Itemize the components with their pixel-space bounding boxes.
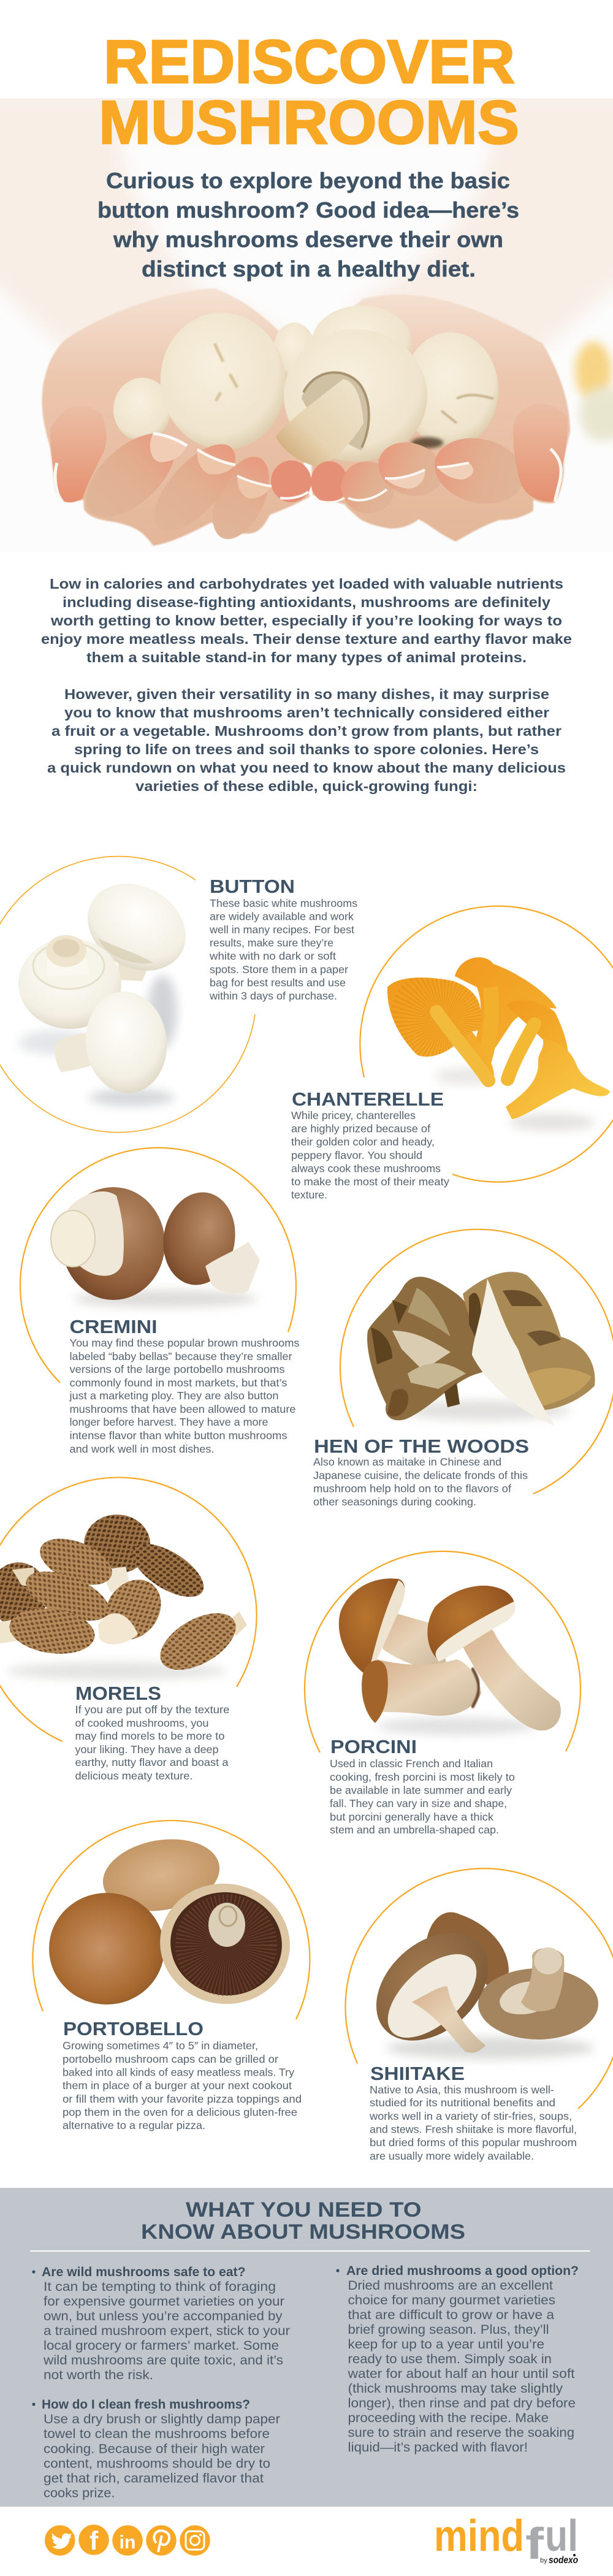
- heading: shiitake: SHIITAKE: [370, 2063, 465, 2084]
- text: cremini description: You may find these popular brown mushrooms: [70, 1337, 300, 1349]
- heading: morels: MORELS: [75, 1683, 161, 1704]
- mushroom center stem: [276, 379, 364, 467]
- question: wild mushrooms: a trained mushroom expert, stick to your: [44, 2324, 290, 2338]
- panel: what you need to know: [0, 2188, 613, 2507]
- text: porcini description: Used in classic French and Italian: [330, 1757, 493, 1770]
- left fingers: [55, 418, 311, 548]
- question: cleaning mushrooms: get that rich, caramelized flavor that: [44, 2471, 264, 2486]
- question: wild mushrooms: wild mushrooms are quite toxic, and it’s: [43, 2353, 283, 2368]
- image: porcini mushrooms: [339, 1578, 561, 1735]
- text: shiitake description: works well in a variety of stir-fries, soups,: [369, 2110, 572, 2122]
- text: hen of the woods description: other seasonings during cooking.: [313, 1496, 476, 1508]
- text: portobello description: alternative to a regular pizza.: [63, 2119, 205, 2131]
- question: cleaning mushrooms: towel to clean the mushrooms before: [44, 2427, 270, 2441]
- subtitle: distinct spot in a healthy diet.: [142, 256, 476, 281]
- panel: hen of the woods: [313, 1229, 613, 1508]
- question: wild mushrooms: Are wild mushrooms safe to eat?: [42, 2265, 245, 2279]
- question: dried mushrooms: (thick mushrooms may take slightly: [348, 2382, 563, 2396]
- logo: mindful by sodexo: f: [525, 2520, 544, 2569]
- logo: mindful by sodexo: sodexo: [549, 2555, 578, 2566]
- text: shiitake description: but dried forms of this popular mushroom: [370, 2136, 577, 2149]
- image: morel mushrooms: [0, 1515, 247, 1681]
- intro text: spring to life on trees and soil thanks to spore colonies. Here’s: [74, 741, 539, 757]
- intro text: a fruit or a vegetable. Mushrooms don’t grow from plants, but rather: [51, 723, 562, 739]
- image: shiitake mushrooms: [356, 1911, 598, 2062]
- heading: hen of the woods: HEN OF THE WOODS: [314, 1435, 529, 1457]
- text: cremini description: labeled “baby bellas” because they’re smaller: [70, 1350, 292, 1363]
- hero photo: hands holding mushrooms: [0, 80, 613, 552]
- left nails: [150, 433, 187, 462]
- image: cremini mushrooms: [51, 1187, 260, 1307]
- question: wild mushrooms: own, but unless you’re accompanied by: [44, 2309, 283, 2323]
- text: chanterelle description: While pricey, chanterelles: [291, 1109, 416, 1122]
- hero blurred backdrop with arms: [0, 98, 613, 446]
- image: hen of the woods mushroom: [367, 1272, 595, 1426]
- question: dried mushrooms: keep for up to a year until you’re: [348, 2337, 544, 2352]
- left hand: [42, 288, 310, 546]
- question: dried mushrooms: water for about half an hour until soft: [347, 2367, 575, 2381]
- right hand: [306, 294, 570, 541]
- text: shiitake description: Native to Asia, this mushroom is well-: [370, 2084, 554, 2096]
- image: button mushrooms: [18, 866, 202, 1106]
- text: morels description: your liking. They have a deep: [75, 1743, 218, 1756]
- intro text: varieties of these edible, quick-growing fungi:: [135, 778, 478, 794]
- question: cleaning mushrooms: How do I clean fresh mushrooms?: [42, 2397, 250, 2412]
- icon: linkedin: [112, 2525, 143, 2556]
- question: cleaning mushrooms: cooking. Because of their high water: [44, 2442, 265, 2456]
- text: shiitake description: and stews. Fresh shiitake is more flavorful,: [370, 2123, 577, 2135]
- title: MUSHROOMS: [99, 88, 519, 157]
- text: porcini description: cooking, fresh porcini is most likely to: [330, 1771, 515, 1783]
- heading: what you need to know: WHAT YOU NEED TO: [186, 2198, 422, 2222]
- text: chanterelle description: texture.: [291, 1188, 327, 1201]
- left thumb: [50, 405, 107, 503]
- text: porcini description: [330, 1757, 515, 1836]
- text: cremini description: commonly found in most markets, but that’s: [70, 1377, 287, 1389]
- panel: porcini: [305, 1551, 581, 1836]
- question: cleaning mushrooms: cooks prize.: [44, 2486, 115, 2501]
- question: dried mushrooms: longer), then rinse and pat dry before: [348, 2396, 576, 2410]
- mushroom right: [403, 332, 498, 448]
- text: shiitake description: are usually more widely available.: [370, 2150, 534, 2162]
- text: chanterelle description: their golden color and heady,: [291, 1136, 435, 1148]
- icon: twitter: [45, 2525, 75, 2556]
- text: button description: [209, 897, 357, 1002]
- question: dried mushrooms: proceeding with the recipe. Make: [348, 2411, 549, 2425]
- panel: shiitake: [345, 1868, 613, 2162]
- mushroom back top: [311, 305, 412, 381]
- text: portobello description: [63, 2039, 302, 2131]
- image: chanterelle mushrooms: [387, 957, 610, 1131]
- question: wild mushrooms: not worth the risk.: [44, 2368, 153, 2382]
- text: morels description: may find morels to be more to: [75, 1730, 224, 1742]
- question: dried mushrooms: brief growing season. Plus, they’ll: [348, 2323, 549, 2337]
- question: cleaning mushrooms: [32, 2397, 280, 2501]
- logo: mindful by sodexo: [434, 2512, 578, 2569]
- text: chanterelle description: peppery flavor. You should: [291, 1149, 422, 1161]
- text: shiitake description: studied for its nutritional benefits and: [370, 2096, 555, 2109]
- text: portobello description: them in place of a burger at your next cookout: [63, 2079, 292, 2092]
- text: porcini description: fall. They can vary in size and shape,: [330, 1797, 507, 1810]
- heading: what you need to know: KNOW ABOUT MUSHROOMS: [141, 2220, 465, 2244]
- subtitle: button mushroom? Good idea—here’s: [97, 197, 519, 223]
- panel: morels: [0, 1477, 257, 1782]
- text: chanterelle description: always cook these mushrooms: [291, 1163, 441, 1175]
- heading: porcini: PORCINI: [330, 1736, 417, 1757]
- intro text: a quick rundown on what you need to know about the many delicious: [47, 760, 566, 776]
- mushroom big left: [151, 305, 295, 458]
- text: cremini description: [69, 1337, 300, 1455]
- intro text: enjoy more meatless meals. Their dense texture and earthy flavor make: [41, 631, 572, 647]
- icon: pinterest: [146, 2525, 177, 2556]
- question: wild mushrooms: It can be tempting to think of foraging: [44, 2280, 276, 2294]
- title: REDISCOVER: [104, 28, 515, 96]
- text: cremini description: intense flavor than white button mushrooms: [70, 1429, 287, 1442]
- icon: instagram: [180, 2525, 210, 2556]
- title: [99, 28, 519, 157]
- mushroom left stem: [113, 378, 171, 441]
- text: button description: These basic white mushrooms: [210, 897, 357, 909]
- question: dried mushrooms: sure to strain and reserve the soaking: [348, 2426, 574, 2440]
- text: shiitake description: [369, 2084, 577, 2162]
- text: morels description: earthy, nutty flavor and boast a: [75, 1756, 229, 1768]
- text: button description: bag for best results and use: [210, 976, 346, 988]
- intro text: including disease-fighting antioxidants, mushrooms are definitely: [63, 594, 550, 610]
- text: portobello description: or fill them with your favorite pizza toppings and: [63, 2093, 302, 2105]
- text: hen of the woods description: Also known as maitake in Chinese and: [313, 1456, 501, 1468]
- intro text: [41, 576, 572, 794]
- text: portobello description: Growing sometimes 4″ to 5″ in diameter,: [63, 2039, 258, 2052]
- text: button description: are widely available and work: [210, 910, 354, 922]
- text: portobello description: portobello mushroom caps can be grilled or: [63, 2053, 278, 2065]
- text: hen of the woods description: Japanese cuisine, the delicate fronds of this: [313, 1469, 528, 1481]
- logo: mindful by sodexo: by: [540, 2557, 547, 2564]
- text: cremini description: longer before harvest. They have a more: [70, 1416, 268, 1428]
- text: cremini description: mushrooms that have been allowed to mature: [70, 1403, 296, 1415]
- question: dried mushrooms: choice for many gourmet varieties: [348, 2293, 555, 2307]
- icon: linkedin: in: [119, 2531, 136, 2553]
- panel: portobello: [32, 1821, 310, 2131]
- intro text: you to know that mushrooms aren’t technically considered either: [64, 705, 549, 720]
- icon: facebook: f: [89, 2526, 99, 2556]
- right nails: [385, 470, 425, 489]
- text: cremini description: and work well in most dishes.: [70, 1443, 215, 1455]
- text: morels description: of cooked mushrooms, you: [75, 1717, 208, 1729]
- question: cleaning mushrooms: Use a dry brush or slightly damp paper: [44, 2412, 280, 2426]
- question: wild mushrooms: [32, 2265, 290, 2382]
- text: button description: spots. Store them in a paper: [210, 963, 348, 976]
- panel: cremini: [20, 1148, 300, 1455]
- intro text: worth getting to know better, especially if you’re looking for ways to: [50, 613, 562, 629]
- panel: chanterelle: [291, 906, 613, 1201]
- question: dried mushrooms: liquid—it’s packed with flavor!: [348, 2440, 528, 2455]
- heading: what you need to know: [141, 2198, 465, 2244]
- social icons: [45, 2524, 210, 2556]
- heading: button: BUTTON: [210, 876, 295, 897]
- text: hen of the woods description: mushroom help hold on to the flavors of: [313, 1483, 511, 1495]
- question: dried mushrooms: [336, 2263, 579, 2455]
- text: cremini description: just a marketing ploy. They are also button: [69, 1389, 278, 1402]
- question: dried mushrooms: ready to use them. Simply soak in: [348, 2352, 552, 2366]
- subtitle: why mushrooms deserve their own: [113, 227, 503, 252]
- mushroom center cap: [284, 329, 427, 462]
- text: portobello description: baked into all kinds of easy meatless meals. Try: [63, 2066, 294, 2079]
- heading: chanterelle: CHANTERELLE: [292, 1088, 444, 1110]
- text: chanterelle description: [291, 1109, 449, 1201]
- mushroom back small: [273, 323, 315, 376]
- text: button description: white with no dark or soft: [209, 950, 336, 962]
- text: button description: results, make sure they’re: [210, 937, 333, 949]
- image: portobello mushrooms: [49, 1830, 298, 2012]
- intro text: However, given their versatility in so many dishes, it may surprise: [64, 686, 549, 702]
- text: portobello description: pop them in the oven for a delicious gluten-free: [63, 2106, 297, 2118]
- panel: button: [0, 857, 357, 1133]
- icon: facebook: [78, 2524, 109, 2556]
- text: porcini description: be available in late summer and early: [330, 1784, 512, 1797]
- text: cremini description: versions of the large portobello mushrooms: [70, 1363, 285, 1375]
- question: wild mushrooms: for expensive gourmet varieties on your: [44, 2295, 284, 2309]
- question: cleaning mushrooms: content, mushrooms should be dry to: [44, 2456, 270, 2471]
- subtitle: [97, 168, 519, 281]
- right fingers: [311, 404, 568, 522]
- text: chanterelle description: to make the most of their meaty: [291, 1175, 449, 1188]
- intro text: them a suitable stand-in for many types of animal proteins.: [86, 649, 527, 665]
- question: dried mushrooms: Dried mushrooms are an excellent: [348, 2279, 553, 2293]
- text: hen of the woods description: [313, 1456, 528, 1508]
- logo: mindful by sodexo: ul: [545, 2512, 578, 2561]
- text: chanterelle description: are highly prized because of: [291, 1122, 430, 1134]
- question: wild mushrooms: local grocery or farmers’ market. Some: [44, 2339, 279, 2353]
- subtitle: Curious to explore beyond the basic: [106, 168, 510, 193]
- text: morels description: delicious meaty texture.: [75, 1770, 192, 1782]
- question: dried mushrooms: Are dried mushrooms a good option?: [346, 2263, 579, 2278]
- text: morels description: [75, 1703, 229, 1782]
- text: porcini description: stem and an umbrella-shaped cap.: [330, 1824, 499, 1836]
- heading: portobello: PORTOBELLO: [63, 2018, 204, 2039]
- question: dried mushrooms: that are difficult to grow or have a: [348, 2308, 554, 2322]
- heading: cremini: CREMINI: [70, 1316, 157, 1337]
- intro text: Low in calories and carbohydrates yet loaded with valuable nutrients: [50, 576, 563, 592]
- text: button description: within 3 days of purchase.: [209, 990, 337, 1002]
- text: button description: well in many recipes. For best: [209, 923, 354, 936]
- text: porcini description: but porcini generally have a thick: [330, 1811, 493, 1823]
- text: morels description: If you are put off by the texture: [75, 1703, 229, 1716]
- logo: mindful by sodexo: mind: [434, 2512, 524, 2561]
